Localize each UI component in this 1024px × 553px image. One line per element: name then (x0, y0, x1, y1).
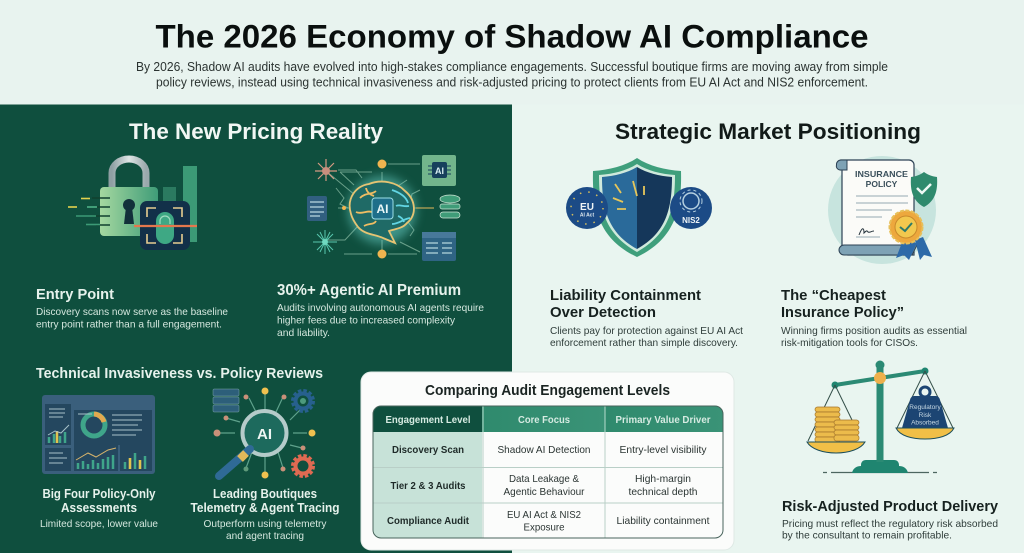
icon: AI telemetry magnifier (213, 388, 316, 478)
block: leading boutiques: Outperform using telemetry (204, 518, 327, 530)
block: entry point: Entry Point (36, 286, 114, 303)
block: leading boutiques (190, 487, 340, 542)
intro text: policy reviews, instead using technical invasiveness and risk-adjusted pricing to protect clients from EU AI Act and NIS2 enforcement. (156, 76, 868, 90)
block: cheapest insurance policy: risk-mitigation tools for CISOs. (781, 337, 918, 349)
block: agentic AI premium (277, 282, 484, 339)
block: entry point: Discovery scans now serve as the baseline (36, 306, 228, 318)
block: liability containment: Clients pay for protection against EU AI Act (550, 325, 743, 337)
icon: shield with EU AI Act and NIS2 (566, 158, 712, 257)
icon: shield with EU AI Act and NIS2: NIS2 (682, 216, 700, 225)
header (136, 18, 888, 90)
comparison table: High-margin (635, 473, 691, 485)
block: agentic AI premium: higher fees due to increased complexity (277, 314, 456, 326)
icon: padlock and fingerprint scan (68, 159, 197, 250)
block: liability containment (550, 287, 743, 349)
intro text: By 2026, Shadow AI audits have evolved into high-stakes compliance engagements. Successful boutique firms are moving away from simple (136, 60, 888, 74)
comparison table: Liability containment (616, 515, 710, 527)
block: risk-adjusted product delivery (782, 498, 999, 542)
block: risk-adjusted product delivery: Pricing must reflect the regulatory risk absorbed (782, 518, 998, 530)
comparison table: Core Focus (518, 414, 570, 426)
block: leading boutiques: and agent tracing (226, 530, 304, 542)
icon: AI telemetry magnifier: AI (257, 426, 272, 443)
icon: AI brain network (307, 155, 460, 261)
icon: shield with EU AI Act and NIS2: AI Act (580, 212, 594, 218)
icon: policy dashboard (42, 395, 155, 474)
block: big four (40, 487, 158, 530)
table card: comparing audit engagement levels (361, 372, 734, 550)
block: agentic AI premium: 30%+ Agentic AI Premium (277, 282, 461, 299)
block: entry point: entry point rather than a full engagement. (36, 318, 222, 330)
block: risk-adjusted product delivery: Risk-Adjusted Product Delivery (782, 498, 999, 515)
block: big four: Limited scope, lower value (40, 518, 158, 530)
comparison table: Agentic Behaviour (504, 486, 585, 498)
block: leading boutiques: Telemetry & Agent Tracing (190, 501, 340, 515)
comparison table: EU AI Act & NIS2 (507, 509, 581, 521)
block: cheapest insurance policy: The “Cheapest (781, 287, 886, 304)
block: cheapest insurance policy: Winning firms position audits as essential (781, 325, 967, 337)
panel: the new pricing reality (0, 104, 512, 553)
intro text (136, 60, 888, 90)
block: liability containment: Over Detection (550, 304, 656, 321)
comparison table: technical depth (628, 486, 698, 498)
icon: balance scale (807, 360, 954, 473)
comparison table: Entry-level visibility (620, 444, 707, 456)
block: risk-adjusted product delivery: by the consultant to remain profitable. (782, 530, 952, 542)
comparison table: Data Leakage & (509, 473, 579, 485)
comparison table: Engagement Level (386, 414, 471, 426)
icon: AI brain network: AI (435, 166, 444, 176)
icon: insurance policy document: INSURANCE (855, 169, 908, 179)
block: entry point (36, 286, 228, 330)
heading: strategic market positioning: Strategic Market Positioning (615, 119, 921, 144)
comparison table: Tier 2 & 3 Audits (390, 480, 466, 492)
block: big four: Assessments (61, 501, 137, 515)
heading: new pricing reality: The New Pricing Reality (129, 119, 384, 144)
comparison table: Primary Value Driver (616, 414, 710, 426)
icon: shield with EU AI Act and NIS2: EU (580, 202, 594, 213)
block: liability containment: enforcement rather than simple discovery. (550, 337, 738, 349)
panel: strategic market positioning (512, 104, 1024, 553)
title: The 2026 Economy of Shadow AI Compliance (156, 18, 868, 54)
block: agentic AI premium: Audits involving autonomous AI agents require (277, 302, 484, 314)
icon: balance scale: Absorbed (911, 420, 939, 426)
icon: AI brain network: AI (376, 202, 388, 216)
block: leading boutiques: Leading Boutiques (213, 487, 317, 501)
icon: insurance policy document (828, 156, 937, 264)
icon: balance scale: Risk (919, 412, 932, 419)
block: cheapest insurance policy (781, 287, 967, 349)
comparison table: Shadow AI Detection (498, 444, 591, 456)
comparison table: Discovery Scan (392, 444, 464, 456)
heading: technical invasiveness: Technical Invasiveness vs. Policy Reviews (36, 366, 323, 382)
comparison table (373, 406, 723, 538)
block: agentic AI premium: and liability. (277, 327, 330, 339)
block: liability containment: Liability Containment (550, 287, 701, 304)
table heading: Comparing Audit Engagement Levels (425, 382, 670, 399)
block: big four: Big Four Policy-Only (42, 487, 156, 501)
comparison table: Exposure (524, 522, 565, 534)
block: cheapest insurance policy: Insurance Policy” (781, 304, 904, 321)
icon: insurance policy document: POLICY (866, 179, 898, 189)
icon: balance scale: Regulatory (909, 404, 941, 411)
comparison table: Compliance Audit (387, 515, 469, 527)
